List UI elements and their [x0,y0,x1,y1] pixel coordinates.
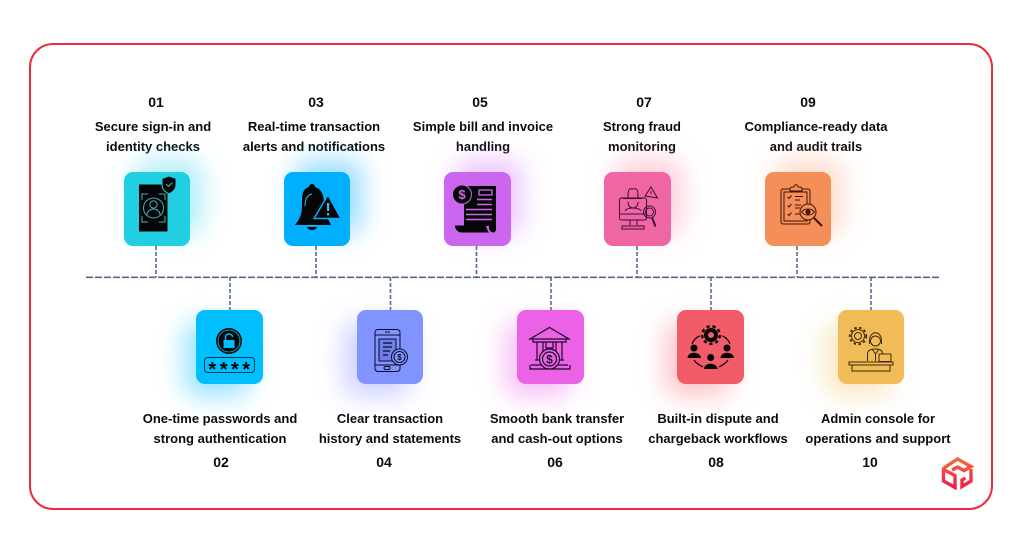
label 08: Built-in dispute and [657,410,779,426]
label 08: chargeback workflows [648,430,788,446]
label 03: Real-time transaction [248,119,380,134]
label 09: Compliance-ready data [744,119,888,134]
icon card: admin console [838,310,904,384]
glow 10 [825,322,891,396]
icon card: one-time password: **** [208,359,254,381]
number 10: 10 [862,454,878,470]
number 09: 09 [800,94,816,110]
number 05: 05 [472,94,488,110]
icon card: dispute workflow [677,310,744,384]
label 09: and audit trails [770,139,862,154]
glow 02 [184,322,250,396]
glow 03 [296,160,362,234]
glow 06 [505,322,571,396]
number 06: 06 [547,454,563,470]
label 07: monitoring [608,139,676,154]
item 06 [490,308,624,470]
label 02 [143,410,297,446]
item 04 [319,310,461,470]
number 03: 03 [308,94,324,110]
label 04 [319,410,461,446]
label 10: Admin console for [821,410,935,426]
label 07 [603,119,681,154]
icon card: transaction history: $ [397,353,402,362]
item 09 [744,94,888,249]
icon card: bank transfer: $ [546,352,553,366]
icon card: fraud monitoring [604,172,670,246]
glow 04 [344,322,410,396]
icon card: audit trail [764,172,831,246]
icon card: transaction history [356,310,423,384]
item 02 [143,305,297,470]
icon card: one-time password [196,310,262,384]
glow 01 [136,160,202,234]
label 01: Secure sign-in and [95,119,211,134]
icon card: invoice [444,172,510,246]
item 05 [413,94,553,247]
label 08 [648,410,788,446]
label 06: Smooth bank transfer [490,410,624,426]
item 03 [243,94,385,251]
label 02: One-time passwords and [143,410,297,426]
label 07: Strong fraud [603,119,681,134]
label 02: strong authentication [154,430,286,446]
label 05: Simple bill and invoice [413,119,553,134]
icon card: alert bell [284,172,350,246]
label 06 [490,410,624,446]
number 04: 04 [376,454,392,470]
number 01: 01 [148,94,164,110]
number 08: 08 [708,454,724,470]
label 05: handling [456,139,510,154]
item 01 [95,94,218,250]
number 07: 07 [636,94,652,110]
icon card: invoice: $ [458,186,466,202]
label 04: Clear transaction [337,410,443,426]
label 03: alerts and notifications [243,139,385,154]
glow 08 [665,322,731,396]
label 06: and cash-out options [491,430,623,446]
label 05 [413,119,553,154]
number 02: 02 [213,454,229,470]
glow 09 [776,160,842,234]
label 10: operations and support [805,430,951,446]
logo cube [942,457,974,490]
label 09 [744,119,888,154]
label 04: history and statements [319,430,461,446]
icon card: bank transfer [517,310,584,384]
item 07 [603,94,694,249]
label 01: identity checks [106,139,200,154]
glow 05 [456,160,522,234]
item 10 [805,308,951,470]
icon card: secure sign-in [124,172,190,246]
label 10 [805,410,951,446]
glow 07 [616,160,682,234]
label 01 [95,119,211,154]
item 08 [648,308,788,470]
label 03 [243,119,385,154]
